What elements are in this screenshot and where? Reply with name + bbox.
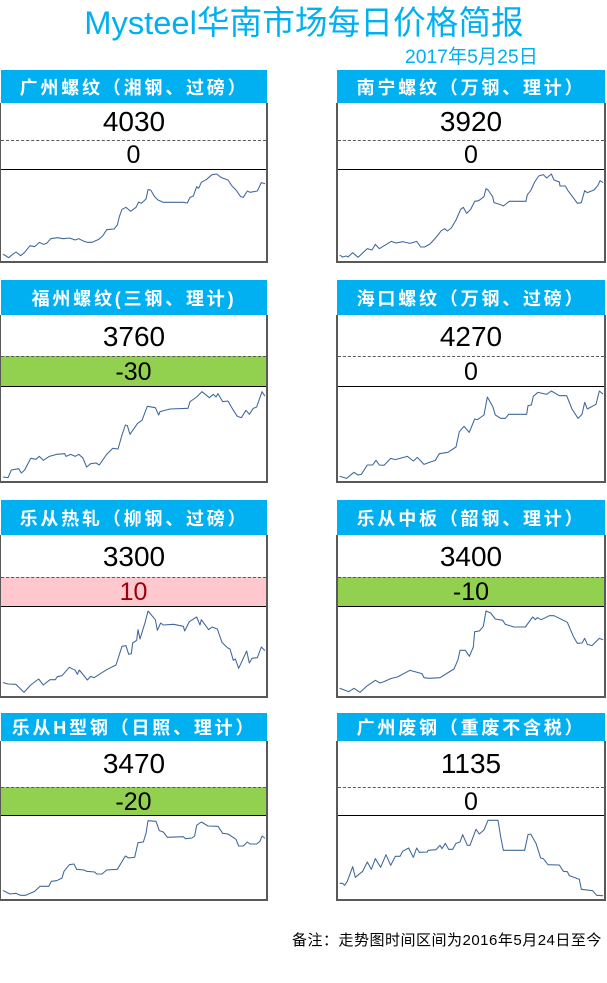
line chart [340, 610, 604, 693]
panel: 广州废钢 [336, 713, 606, 901]
heading [1, 70, 267, 103]
line chart [339, 390, 604, 479]
change: 0 [464, 788, 478, 816]
line chart [340, 820, 604, 896]
title: Mysteel华南市场每日价格简报 [84, 4, 524, 41]
panel: 福州螺纹 [0, 280, 268, 483]
change [338, 140, 604, 170]
heading [1, 280, 267, 315]
change: -20 [115, 788, 152, 816]
line chart [2, 391, 266, 478]
change [338, 356, 604, 387]
change [338, 787, 604, 816]
change: 10 [120, 578, 147, 606]
line chart [339, 173, 604, 258]
panel: 广州螺纹 [0, 70, 268, 263]
heading [1, 500, 267, 535]
date: 2017年5月25日 [405, 47, 538, 68]
change [1, 356, 266, 387]
heading: 乐从中板（韶钢、理计） [357, 509, 585, 529]
heading [337, 70, 605, 103]
price: 3300 [103, 541, 165, 572]
change: -30 [115, 358, 152, 386]
line chart [2, 174, 266, 258]
panel: 海口螺纹 [336, 280, 606, 483]
price: 4270 [440, 321, 502, 352]
heading [337, 500, 605, 535]
price: 3760 [103, 321, 165, 352]
heading: 广州螺纹（湘钢、过磅） [20, 78, 248, 98]
change [338, 577, 604, 607]
panel: 南宁螺纹 [336, 70, 606, 263]
change [1, 787, 266, 816]
change: 0 [127, 141, 140, 169]
change [1, 577, 266, 607]
panel: 乐从中板 [336, 500, 606, 698]
heading: 南宁螺纹（万钢、理计） [357, 78, 585, 98]
footnote: 备注：走势图时间区间为2016年5月24日至今 [292, 932, 602, 949]
change: 0 [464, 141, 478, 169]
heading: 福州螺纹(三钢、理计) [32, 289, 236, 309]
panel: 乐从热轧 [0, 500, 268, 698]
heading: 海口螺纹（万钢、过磅） [357, 289, 585, 309]
heading: 乐从H型钢（日照、理计） [12, 718, 256, 738]
price: 3920 [440, 106, 502, 137]
price: 1135 [441, 748, 501, 779]
line chart [2, 610, 266, 693]
price: 3400 [440, 541, 502, 572]
heading: 乐从热轧（柳钢、过磅） [20, 509, 248, 529]
line chart [2, 820, 266, 896]
price: 4030 [103, 106, 165, 137]
heading [1, 713, 267, 741]
change: -10 [453, 578, 489, 606]
heading [337, 280, 605, 315]
heading [337, 713, 605, 741]
price: 3470 [103, 748, 165, 779]
panel: 乐从H型钢 [0, 713, 268, 901]
heading: 广州废钢（重废不含税） [357, 718, 585, 738]
change [1, 140, 266, 170]
change: 0 [464, 358, 478, 386]
